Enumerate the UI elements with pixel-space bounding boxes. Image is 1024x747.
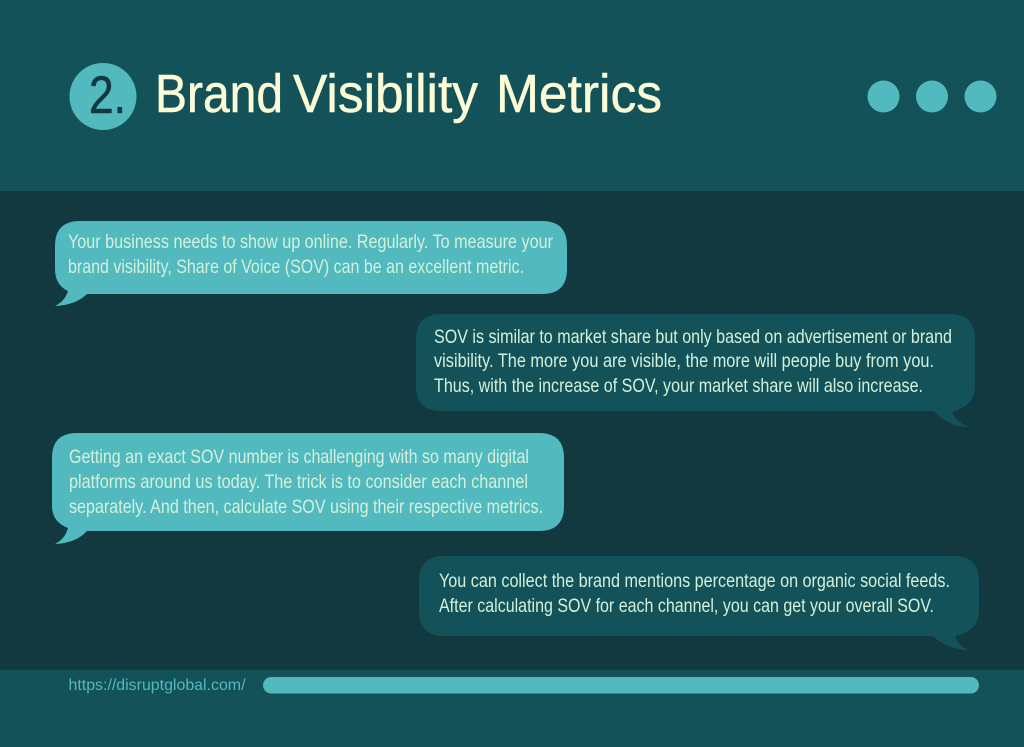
text: bubble 2 [434, 326, 952, 397]
text: bubble 3: platforms around us today. The trick is to consider each channel [69, 471, 528, 493]
title: Visibility [293, 64, 478, 124]
text: bubble 1 [68, 231, 553, 278]
text: bubble 2: visibility. The more you are visible, the more will people buy from you. [434, 350, 934, 372]
text: bubble 4 [439, 570, 950, 617]
text: bubble 3: Getting an exact SOV number is challenging with so many digital [69, 446, 529, 468]
text: bubble 3: separately. And then, calculate SOV using their respective metrics. [69, 496, 543, 518]
text: bubble 1: Your business needs to show up online. Regularly. To measure your [68, 231, 553, 253]
panel: header band [0, 0, 1024, 191]
chat bubble 3 [52, 433, 564, 544]
icon: number badge [70, 63, 136, 130]
title [155, 64, 662, 124]
chat bubble 4 [419, 556, 979, 650]
text: bubble 4: After calculating SOV for each channel, you can get your overall SOV. [439, 595, 934, 617]
title: Metrics [496, 64, 662, 124]
chat bubble 1 [55, 221, 567, 306]
text: bubble 1: brand visibility, Share of Voice (SOV) can be an excellent metric. [68, 256, 524, 278]
title: Brand [155, 64, 283, 124]
icon: number badge: 2. [89, 66, 126, 125]
footer progress bar [263, 677, 979, 694]
panel: main dark background [0, 191, 1024, 670]
text: bubble 2: Thus, with the increase of SOV, your market share will also increase. [434, 375, 923, 397]
footer url: https://disruptglobal.com/ [68, 677, 246, 694]
icon: three dots [868, 80, 996, 112]
panel: footer band [0, 670, 1024, 747]
title group [70, 63, 662, 130]
chat bubble 2 [416, 314, 975, 427]
text: bubble 3 [69, 446, 543, 518]
